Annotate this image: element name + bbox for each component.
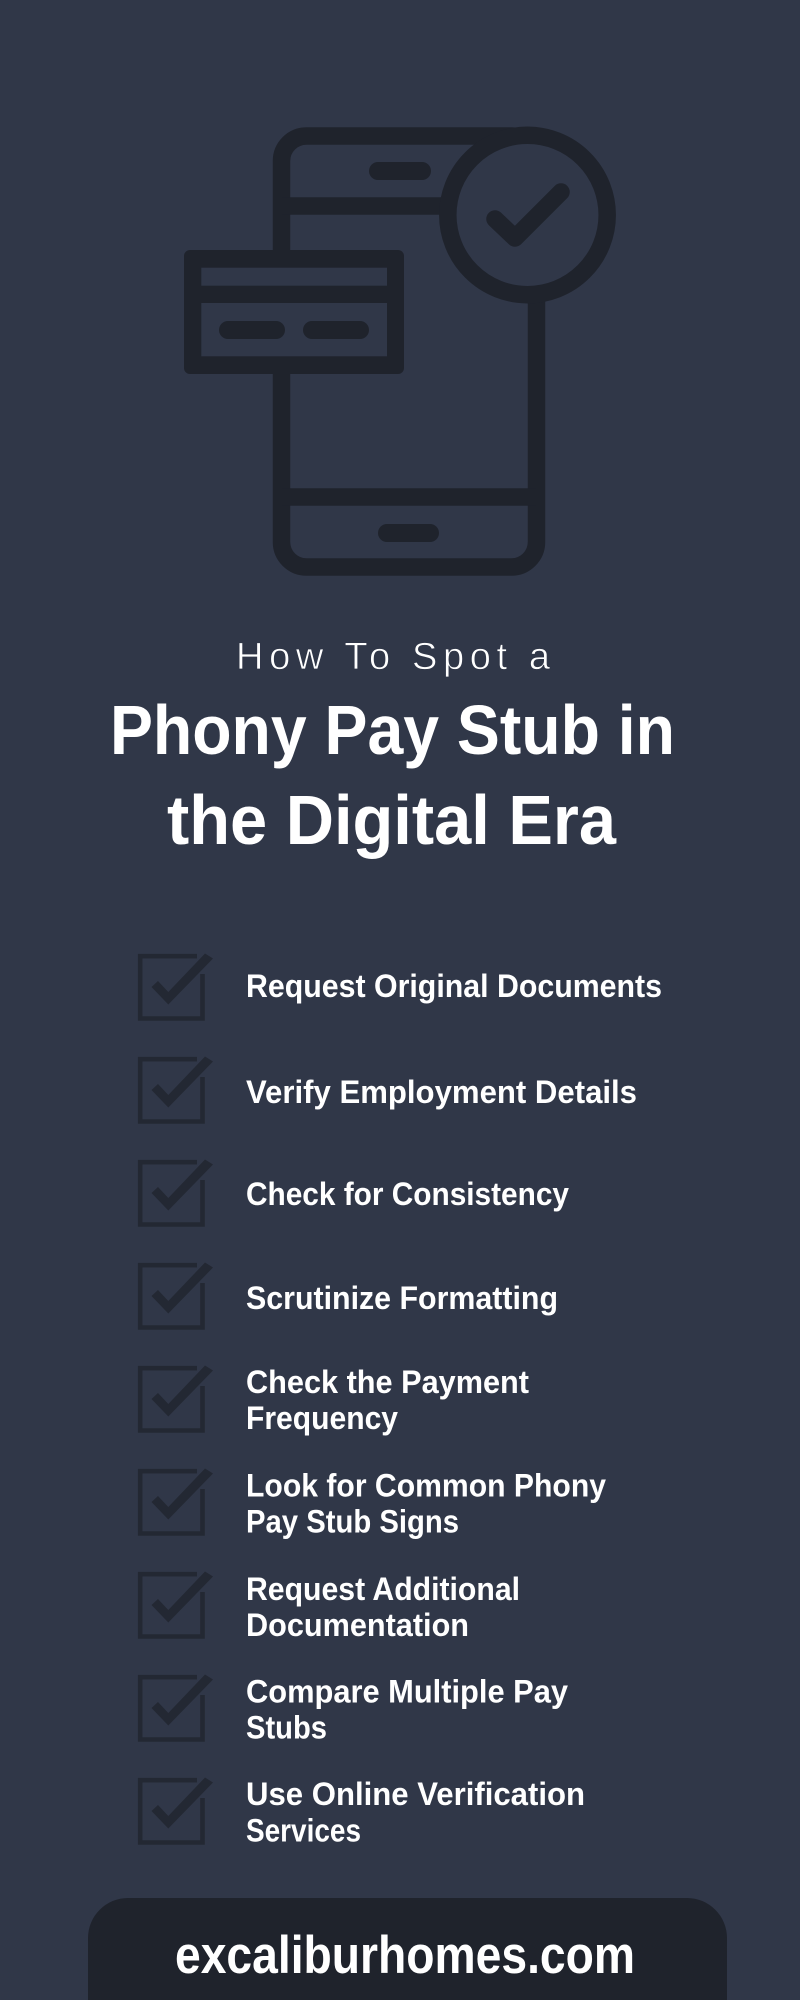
item 9: Services [246,1812,361,1848]
item 1 [140,954,662,1018]
item 5: Frequency [246,1400,398,1436]
item 8: Stubs [246,1710,327,1746]
item 7: Documentation [246,1607,469,1643]
icon part: payment card [184,250,404,374]
icon part: phone home button [378,524,439,542]
item 5 [140,1364,529,1436]
item 3: Check for Consistency [246,1176,569,1212]
item 9: Use Online Verification [246,1776,585,1812]
item 7 [140,1571,520,1643]
footer panel [88,1898,727,2000]
subtitle: How To Spot a [236,636,551,678]
item 6: Pay Stub Signs [246,1504,459,1540]
icon part: phone speaker [369,162,431,180]
item 5: Check the Payment [246,1364,529,1400]
title [110,691,675,859]
icon part: phone body [282,136,536,567]
item 6: Look for Common Phony [246,1468,606,1504]
icon: smartphone with card and check badge [184,135,607,567]
item 8 [140,1674,568,1746]
item 3 [140,1160,569,1224]
item 4 [140,1262,558,1328]
footer website: excaliburhomes.com [175,1926,635,1985]
item 6 [140,1468,606,1540]
item 8: Compare Multiple Pay [246,1674,568,1710]
item 4: Scrutinize Formatting [246,1280,558,1316]
item 9 [140,1776,585,1848]
checklist [140,954,662,1848]
icon part: check badge [448,135,607,295]
item 1: Request Original Documents [246,968,662,1004]
item 2 [140,1056,637,1122]
title line 1: Phony Pay Stub in [110,691,675,769]
item 2: Verify Employment Details [246,1074,637,1110]
title line 2: the Digital Era [167,781,617,859]
item 7: Request Additional [246,1571,520,1607]
